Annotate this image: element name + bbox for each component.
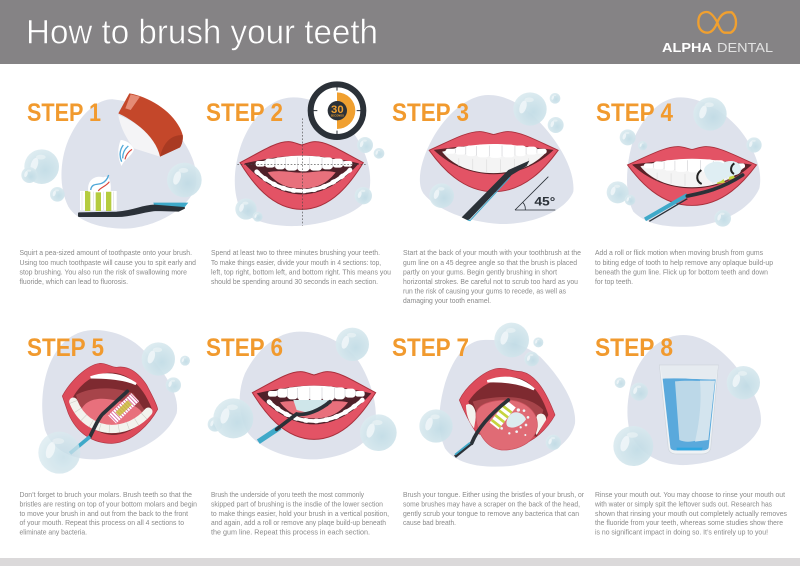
panel: step 8 <box>594 334 787 537</box>
text: step 1: Using too much toothpaste will cause you to spit early and <box>20 258 196 267</box>
icon: 45 degree angle <box>515 177 556 210</box>
text: step 1: Squirt a pea-sized amount of toothpaste onto your brush. <box>20 248 192 257</box>
panel: step 1 <box>20 93 202 286</box>
panel: step 6 <box>206 328 397 537</box>
heading: step 8: STEP 8 <box>595 334 673 362</box>
text: step 5: Don’t forget to bruch your molars. Brush teeth so that the <box>20 490 192 499</box>
text: step 4: Add a roll or flick motion when moving brush from gums <box>595 248 763 257</box>
illustration: toothpaste and brush <box>21 93 202 229</box>
text: step 6: to make things easier, hold your brush in a vertical position, <box>211 509 389 518</box>
text: step 4: beneath the gum line. Flick up for bottom teeth and down <box>595 267 768 276</box>
heading: step 7: STEP 7 <box>392 334 469 362</box>
text: step 2: should be spending around 30 seconds in each section. <box>211 277 378 286</box>
illustration: glass of water <box>613 335 761 466</box>
logo wordmark: DENTAL <box>717 40 773 55</box>
text: step 8: with water or simply spit the leftover suds out. Research has <box>594 499 772 508</box>
text: step 7: gently scrub your tongue to remove any bacterica that can <box>403 509 579 518</box>
icon: 30 second timer: SECONDS <box>331 114 344 118</box>
footer band <box>0 558 800 566</box>
text: step 6: skipped part of brushing is the insdie of the lower section <box>211 499 383 508</box>
text: step 8: is no significant impact in doing so. It’s entirely up to you! <box>595 528 768 537</box>
logo: Alpha Dental <box>662 12 773 55</box>
text: step 3 <box>403 248 581 305</box>
text: step 1: fluoride, which can lead to fluorosis. <box>20 277 128 286</box>
text: step 6: Brush the underside of yoru teeth the most commonly <box>211 490 364 499</box>
heading: step 1: STEP 1 <box>27 99 101 127</box>
text: step 5: eliminate any bacteria. <box>20 528 87 537</box>
illustration: smile with timer <box>235 84 384 226</box>
icon: glass <box>659 365 718 454</box>
text: step 4: for top teeth. <box>595 277 633 286</box>
heading: step 6: STEP 6 <box>206 334 283 362</box>
icon: logo mark <box>698 12 736 33</box>
text: step 1 <box>20 248 196 286</box>
text: step 6: the gum line. Repeat this process in each section. <box>211 528 370 537</box>
text: step 7: some brushes may have a scraper on the back of the head, <box>403 499 580 508</box>
heading: step 2: STEP 2 <box>206 99 283 127</box>
panel: step 4 <box>595 97 773 286</box>
illustration: flick motion <box>607 97 762 227</box>
text: step 2: left, top right, bottom left, and bottom right. This means you <box>211 267 391 276</box>
text: step 7 <box>403 490 584 527</box>
heading: step 5: STEP 5 <box>27 334 104 362</box>
panel: step 3 <box>392 92 581 305</box>
text: step 3: Start at the back of your mouth with your toothbrush at the <box>403 248 581 257</box>
heading: step 3: STEP 3 <box>392 99 469 127</box>
text: step 3: gum line on a 45 degree angle so that the brush is placed <box>403 258 577 267</box>
header band <box>0 0 800 64</box>
text: step 8 <box>594 490 787 537</box>
text: step 3: partly on your gums. Begin gently brushing in short <box>403 267 558 276</box>
illustration: brush at 45 degrees <box>420 92 573 224</box>
icon: 30 second timer <box>311 84 363 137</box>
text: step 5: of your mouth. Repeat this process on all 4 sections to <box>20 518 184 527</box>
text: step 5 <box>20 490 197 537</box>
icon: 30 second timer: 30 <box>331 104 344 116</box>
panel: step 5 <box>20 330 197 537</box>
panel: step 7 <box>392 323 584 527</box>
text: step 8: the fluoride from your teeth, whereas some studies show there <box>595 518 783 527</box>
text: step 4: to biting edge of tooth to help remove any oplaque build-up <box>595 258 773 267</box>
text: step 6: and again, add a roll or remove any plaqe build-up beneath <box>211 518 386 527</box>
text: step 4 <box>595 248 773 286</box>
text: step 7: Brush your tongue. Either using the bristles of your brush, or <box>403 490 584 499</box>
text: step 2 <box>211 248 391 286</box>
illustration: brushing molars <box>38 330 190 474</box>
logo wordmark: ALPHA <box>662 40 713 55</box>
title: How to brush your teeth <box>26 14 378 52</box>
illustration: brushing underside <box>208 328 397 459</box>
text: step 1: stop brushing. You also run the risk of swallowing more <box>20 267 187 276</box>
text: step 6 <box>211 490 389 537</box>
text: step 8: Rinse your mouth out. You may choose to rinse your mouth out <box>595 490 786 499</box>
text: step 5: bristles are resting on top of your bottom molars and begin <box>20 499 197 508</box>
icon: 45 degree angle: 45° <box>534 194 556 208</box>
text: step 2: To make things easier, divide your mouth in 4 sections: top, <box>211 258 381 267</box>
illustration: brushing tongue <box>419 323 575 467</box>
text: step 3: run the risk of causing your gums to recede, as well as <box>403 287 566 296</box>
heading: step 4: STEP 4 <box>596 99 673 127</box>
text: step 2: Spend at least two to three minutes brushing your teeth. <box>211 248 380 257</box>
text: step 3: damaging your tooth enamel. <box>403 296 491 305</box>
text: step 3: horizontal strokes. Be careful not to scrub too hard as you <box>403 277 578 286</box>
panel: step 2 <box>206 84 391 286</box>
text: step 5: to move your brush in and out from the back to the front <box>20 509 189 518</box>
text: step 8: shown that rinsing your mouth out completely actually removes <box>595 509 787 518</box>
text: step 7: cause bad breath. <box>403 518 456 527</box>
